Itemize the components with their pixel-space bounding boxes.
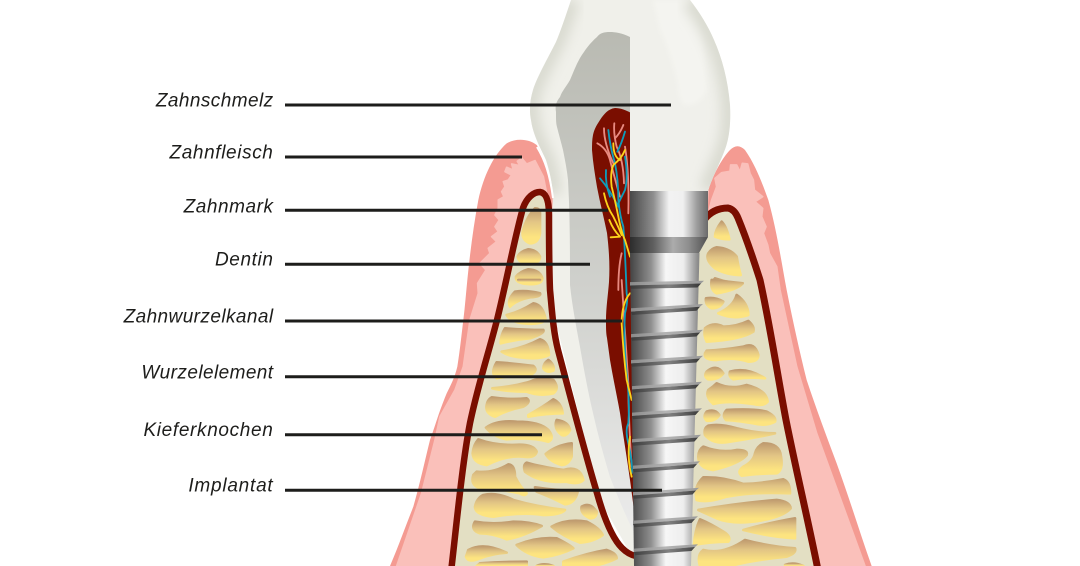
implant dark band — [630, 237, 708, 253]
tooth left half: enamel and root — [530, 0, 634, 560]
tooth right half: crown enamel — [630, 0, 730, 191]
left gum — [390, 140, 557, 566]
pulp chamber — [592, 108, 634, 510]
label: Implantat: Implantat — [188, 476, 274, 496]
right jawbone — [680, 208, 818, 566]
spongy bone cells, left, lower — [466, 280, 617, 566]
implant threads — [630, 281, 704, 555]
label: Dentin: Dentin — [215, 250, 274, 270]
nerves and vessels — [597, 123, 632, 477]
label: Zahnwurzelkanal: Zahnwurzelkanal — [123, 306, 274, 328]
implant body — [630, 253, 700, 566]
right gum — [700, 146, 872, 566]
spongy bone cells, left, upper — [516, 208, 542, 284]
illustration: tooth and implant cross-section with labels — [123, 0, 872, 566]
label: Wurzelelement: Wurzelelement — [141, 362, 274, 384]
nerves: pink — [597, 123, 632, 467]
nerves: yellow — [604, 143, 632, 477]
implant collar — [630, 191, 708, 237]
left bone outline — [451, 192, 636, 566]
label: Zahnfleisch: Zahnfleisch — [169, 142, 274, 164]
label: Zahnschmelz: Zahnschmelz — [155, 90, 274, 112]
right bone outline — [704, 208, 818, 566]
spongy bone cells, right, lower — [694, 280, 803, 566]
nerves: blue — [600, 130, 632, 473]
label: Kieferknochen: Kieferknochen — [143, 420, 274, 441]
label: Zahnmark: Zahnmark — [183, 196, 274, 218]
dentin — [556, 32, 634, 532]
spongy bone cells, right, upper — [707, 222, 743, 286]
implant — [630, 191, 708, 566]
left jawbone — [451, 192, 636, 566]
